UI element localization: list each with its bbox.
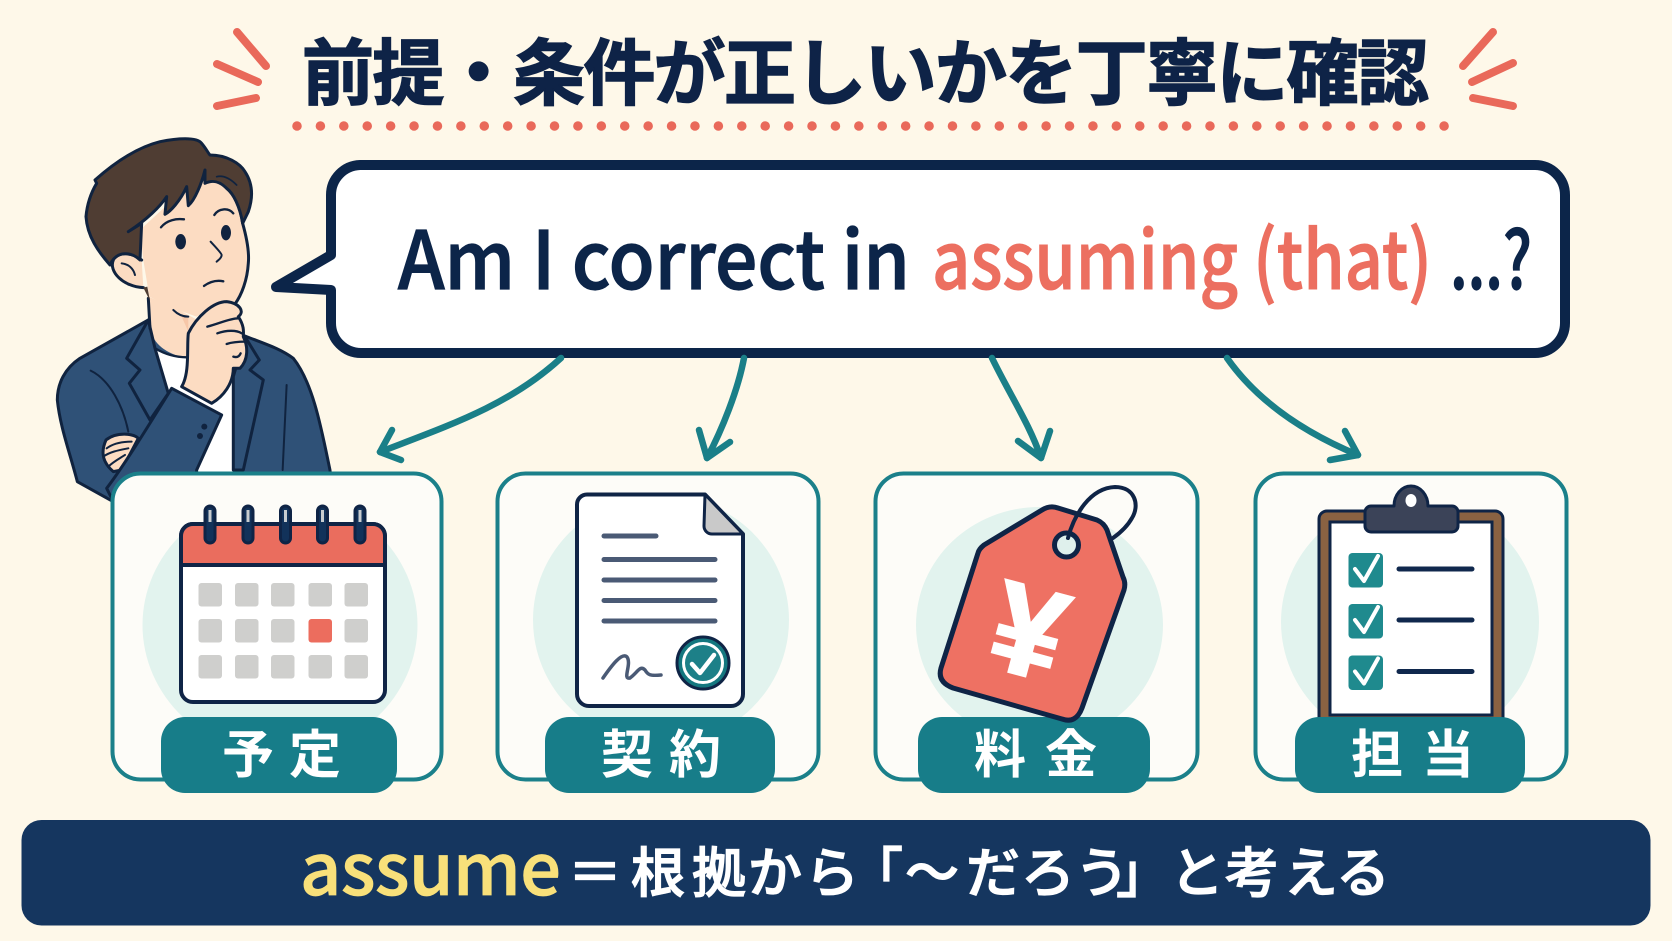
- speech text: ...?: [1450, 197, 1532, 313]
- speech text: [398, 197, 1532, 313]
- arrow: to 契約: [699, 358, 744, 458]
- icon: clipboard checklist: [1319, 486, 1503, 725]
- arrow: to 予定: [380, 358, 561, 460]
- icon: yen price tag: [940, 487, 1136, 720]
- title: 前提・条件が正しいかを丁寧に確認: [302, 15, 1429, 120]
- panel: 担当: [1256, 474, 1566, 793]
- panel: 予定: [112, 474, 442, 793]
- arrow: to 担当: [1227, 358, 1358, 460]
- label pill: 担当: [1295, 713, 1525, 793]
- speech text: Am I correct in: [398, 197, 910, 313]
- label pill: 料金: [918, 713, 1150, 793]
- bottom definition banner: [22, 811, 1650, 926]
- panel: 料金: [876, 474, 1198, 793]
- banner text: definition: ＝根拠から「～だろう」と考える: [568, 829, 1390, 908]
- label pill: 予定: [161, 713, 397, 793]
- illustration: thinking man: [57, 139, 333, 502]
- icon: calendar: [181, 506, 385, 702]
- speech text: assuming (that): [932, 197, 1432, 313]
- label pill: 料金: 料金: [974, 713, 1097, 788]
- speech bubble: [276, 165, 1565, 353]
- label pill: 予定: 予定: [222, 713, 341, 788]
- panel: 契約: [498, 474, 818, 793]
- icon: yen price tag: ¥: [975, 554, 1081, 710]
- icon: right burst accent: [1463, 32, 1513, 106]
- icon: left burst accent: [217, 32, 266, 106]
- banner text: assume: assume: [300, 811, 561, 916]
- icon: contract document: [577, 494, 743, 706]
- arrow: to 料金: [992, 358, 1050, 458]
- label pill: 契約: [545, 713, 775, 793]
- title dotted underline: [297, 121, 1445, 131]
- label pill: 担当: 担当: [1351, 713, 1474, 788]
- label pill: 契約: 契約: [601, 713, 721, 788]
